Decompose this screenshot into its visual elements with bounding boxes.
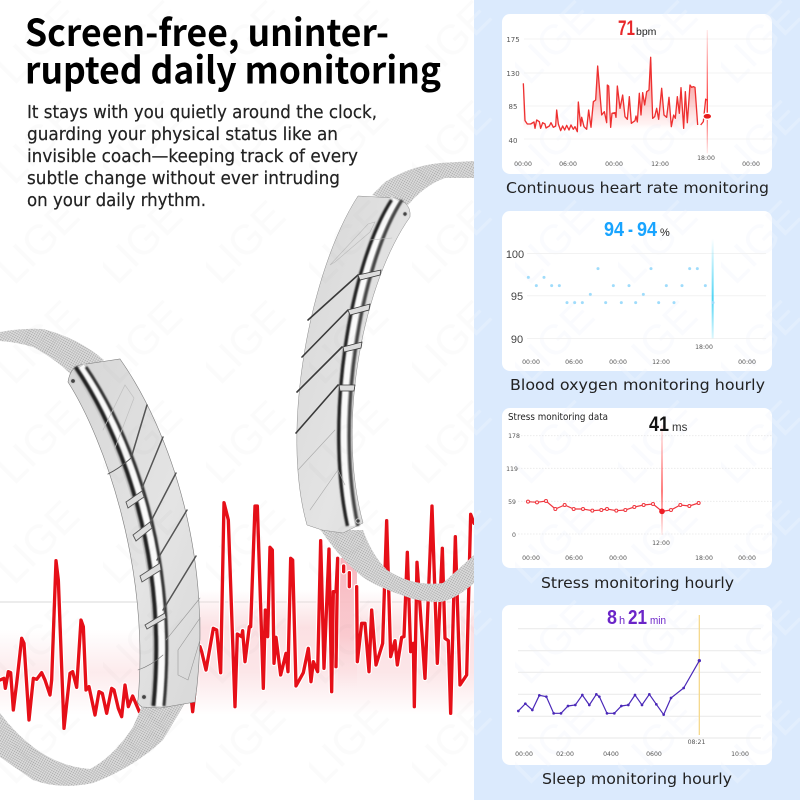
stress axis labels <box>506 433 520 539</box>
oxygen value: 94 <box>604 219 625 241</box>
sleep x labels: 08:21 <box>688 739 705 746</box>
title: Screen-free, uninter- <box>25 3 389 57</box>
stress x labels: 00:00 <box>609 555 627 562</box>
plate: left <box>68 359 200 708</box>
heart rate x labels: 18:00 <box>697 155 715 162</box>
heart rate axis labels: 175 <box>506 36 520 44</box>
sleep x labels: 0400 <box>603 751 619 758</box>
oxygen value: % <box>660 227 670 239</box>
panel: heart rate <box>502 14 772 174</box>
heart rate value <box>618 17 657 40</box>
slats: left <box>103 385 200 680</box>
body text: guarding your physical status like an <box>27 125 338 145</box>
heart rate chart <box>523 30 712 153</box>
right bracelet <box>296 161 474 602</box>
panel: sleep <box>502 605 772 765</box>
sleep x labels: 02:00 <box>556 751 574 758</box>
ECG heart-rate line <box>0 503 474 728</box>
heart rate axis labels <box>506 36 520 145</box>
watermark: blue panel <box>474 0 800 800</box>
oxygen value: 94 <box>637 219 658 241</box>
body text <box>27 103 377 211</box>
stress value <box>649 413 688 436</box>
sleep x labels: 00:00 <box>515 751 533 758</box>
stress axis labels: 178 <box>508 433 520 440</box>
oxygen axis labels <box>506 249 524 346</box>
stress axis labels: 59 <box>508 499 516 506</box>
oxygen axis labels: 90 <box>511 334 523 346</box>
panel: stress <box>502 408 772 568</box>
rivet: left bottom <box>142 695 146 699</box>
mesh band: left top <box>0 329 104 376</box>
heart rate x labels: 00:00 <box>605 161 623 168</box>
oxygen x labels: 00:00 <box>738 359 756 366</box>
sleep value: h <box>619 615 625 627</box>
rivet: right top <box>403 212 407 216</box>
oxygen value <box>604 219 670 241</box>
sleep value: 8 <box>607 607 617 629</box>
sleep chart <box>517 615 701 735</box>
stress title: Stress monitoring data <box>508 412 608 423</box>
oxygen scatter chart <box>527 238 714 338</box>
oxygen x labels <box>522 344 756 366</box>
rivet: right bottom <box>356 519 360 523</box>
body text: on your daily rhythm. <box>27 191 206 211</box>
body text: It stays with you quietly around the clock, <box>27 103 377 123</box>
stress x labels <box>522 540 756 562</box>
oxygen x labels: 00:00 <box>609 359 627 366</box>
title: rupted daily monitoring <box>25 40 441 94</box>
stress chart <box>526 425 700 535</box>
heart rate x labels <box>514 155 760 168</box>
stress axis labels: 0 <box>512 532 516 539</box>
caption: blood oxygen: Blood oxygen monitoring hourly <box>510 376 765 394</box>
heart rate value: bpm <box>636 26 657 38</box>
watermark: left <box>0 0 474 800</box>
mesh band: right bottom <box>320 530 474 602</box>
title <box>25 3 441 94</box>
oxygen axis labels: 100 <box>506 249 524 261</box>
heart rate x labels: 12:00 <box>651 161 669 168</box>
oxygen x labels: 18:00 <box>695 344 713 351</box>
caption: stress: Stress monitoring hourly <box>541 574 734 592</box>
horizontal guide line <box>0 601 474 603</box>
right blue panel <box>474 0 800 800</box>
plate: right <box>297 196 410 533</box>
slats: right <box>296 222 392 510</box>
stress value: 41 <box>649 413 669 436</box>
rivet: left top <box>71 379 75 383</box>
stress value: ms <box>672 422 688 434</box>
stress x labels: 12:00 <box>652 540 670 547</box>
heart rate x labels: 00:00 <box>514 161 532 168</box>
stress axis labels: 119 <box>506 466 518 473</box>
sleep x labels <box>515 739 749 758</box>
stress x labels: 18:00 <box>695 555 713 562</box>
heart rate x labels: 00:00 <box>742 161 760 168</box>
sleep value: min <box>650 615 666 627</box>
heart rate axis labels: 130 <box>506 70 520 78</box>
panel: blood oxygen <box>502 211 772 371</box>
sleep x labels: 0600 <box>646 751 662 758</box>
pink glow under ECG <box>0 558 474 715</box>
oxygen x labels: 00:00 <box>522 359 540 366</box>
heart rate x labels: 06:00 <box>559 161 577 168</box>
oxygen x labels: 06:00 <box>565 359 583 366</box>
heart rate value: 71 <box>618 17 635 40</box>
mesh band: right top <box>372 161 474 205</box>
sleep value: 21 <box>628 607 647 629</box>
caption: heart rate: Continuous heart rate monitoring <box>506 179 769 197</box>
oxygen value: - <box>628 219 633 241</box>
chrome rail: left <box>76 367 167 706</box>
oxygen x labels: 12:00 <box>652 359 670 366</box>
body text: invisible coach—keeping track of every <box>27 147 358 167</box>
stress x labels: 00:00 <box>738 555 756 562</box>
sleep value <box>607 607 666 629</box>
caption: sleep: Sleep monitoring hourly <box>542 770 732 788</box>
heart rate axis labels: 40 <box>509 137 517 145</box>
stress x labels: 06:00 <box>565 555 583 562</box>
stress x labels: 00:00 <box>522 555 540 562</box>
sleep x labels: 10:00 <box>731 751 749 758</box>
oxygen axis labels: 95 <box>511 291 523 303</box>
heart rate axis labels: 85 <box>509 103 517 111</box>
mesh band: left bottom <box>0 703 185 786</box>
chrome rail: right <box>339 200 402 526</box>
left bracelet <box>0 329 200 786</box>
body text: subtle change without ever intruding <box>27 169 340 189</box>
